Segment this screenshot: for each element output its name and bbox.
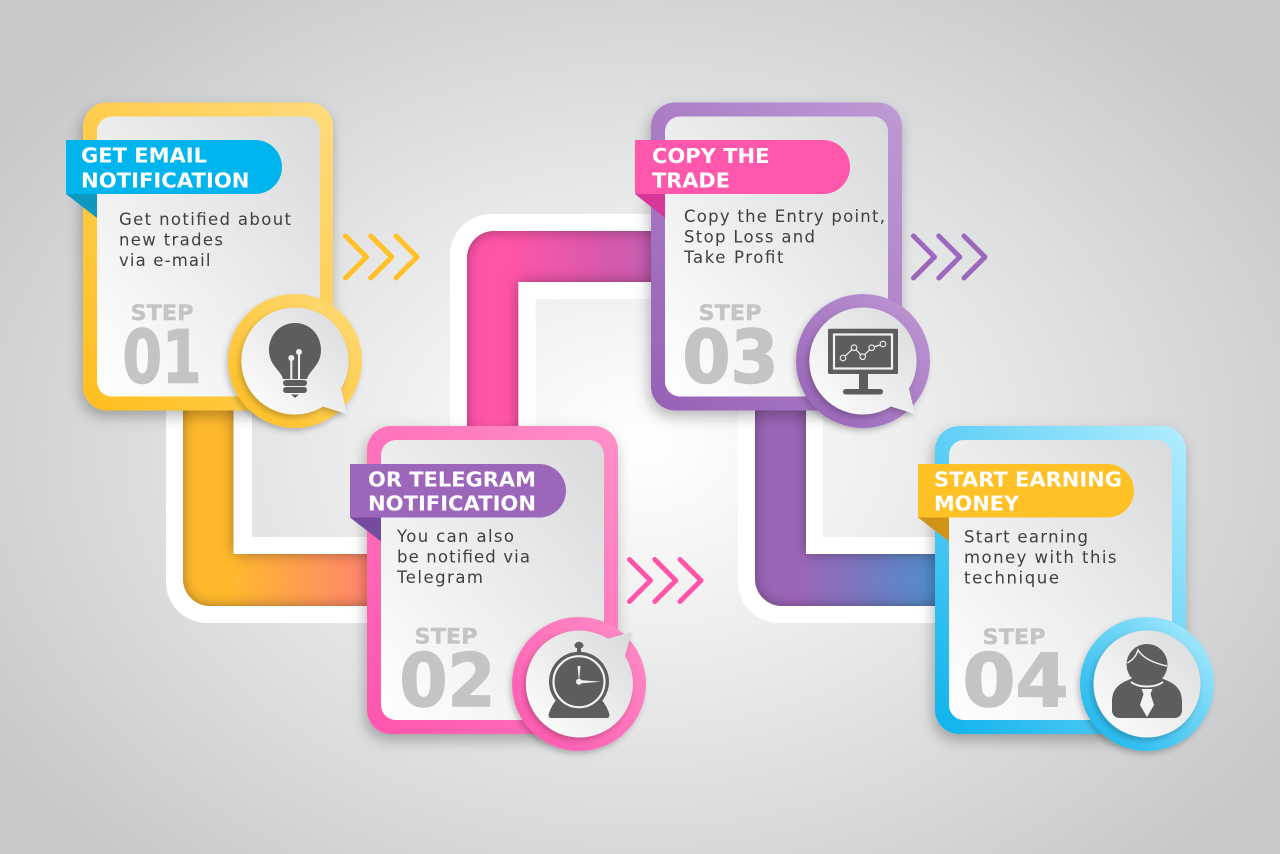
connector: step 2 to step 3 [450,214,670,450]
arrows: step 2 chevrons [630,560,701,602]
heading ribbon [66,140,282,194]
description: be notified via [397,548,530,566]
badge disc with tail [241,307,349,414]
card inner [949,440,1172,720]
arrows: step 1 chevrons [346,236,417,278]
step label: STEP [982,625,1046,649]
connector: step 1 to step 2 [166,390,390,623]
card inner [665,116,888,396]
description: Take Profit [683,248,784,267]
ribbon fold [635,194,665,218]
badge disc with tail [809,307,917,414]
step number: 04 [962,639,1068,724]
description: Get notified about [119,210,292,229]
arrows: step 3 chevrons [914,236,985,278]
ribbon fold [918,518,949,542]
panel: step 2 [350,426,646,751]
badge disc [1094,630,1200,738]
description: via e-mail [119,251,210,270]
description: Copy the Entry point, [684,207,885,226]
description: Start earning [964,528,1088,547]
heading ribbon [635,140,850,194]
description: money with this [964,548,1116,567]
panel: step 1 [66,102,362,428]
heading: NOTIFICATION [368,492,536,516]
ribbon fold [350,518,381,542]
heading ribbon [350,464,566,518]
heading: COPY THE [652,144,770,168]
badge ring [796,294,930,428]
step number: 02 [400,639,496,724]
description: technique [964,568,1059,588]
step number: 01 [122,316,202,401]
card frame [367,426,618,734]
card inner [97,116,320,396]
heading: OR TELEGRAM [368,468,536,492]
heading: MONEY [934,492,1020,516]
icon: stopwatch clock [549,642,609,718]
panel: step 4 [918,426,1214,751]
badge disc with tail [526,630,633,737]
ribbon fold [66,194,97,218]
badge ring [1080,617,1214,751]
connector: step 3 to step 4 [738,390,960,623]
heading: GET EMAIL [81,144,207,168]
description: Telegram [396,568,483,587]
description: You can also [396,527,514,546]
description: Stop Loss and [684,228,815,246]
card frame [83,102,333,410]
step label: STEP [414,624,478,648]
icon: light bulb [269,323,321,398]
badge ring [512,617,646,751]
heading: NOTIFICATION [81,168,250,192]
heading: TRADE [652,169,730,193]
heading: START EARNING [934,468,1122,492]
icon: monitor with chart [828,329,898,394]
heading ribbon [918,464,1134,518]
icon: business person [1112,644,1182,718]
panel: step 3 [635,102,930,428]
step label: STEP [698,301,762,325]
card frame [651,102,902,410]
step label: STEP [130,301,194,325]
badge ring [228,294,362,428]
card frame [935,426,1186,734]
step number: 03 [682,316,778,401]
card inner [381,440,604,720]
description: new trades [119,230,223,250]
